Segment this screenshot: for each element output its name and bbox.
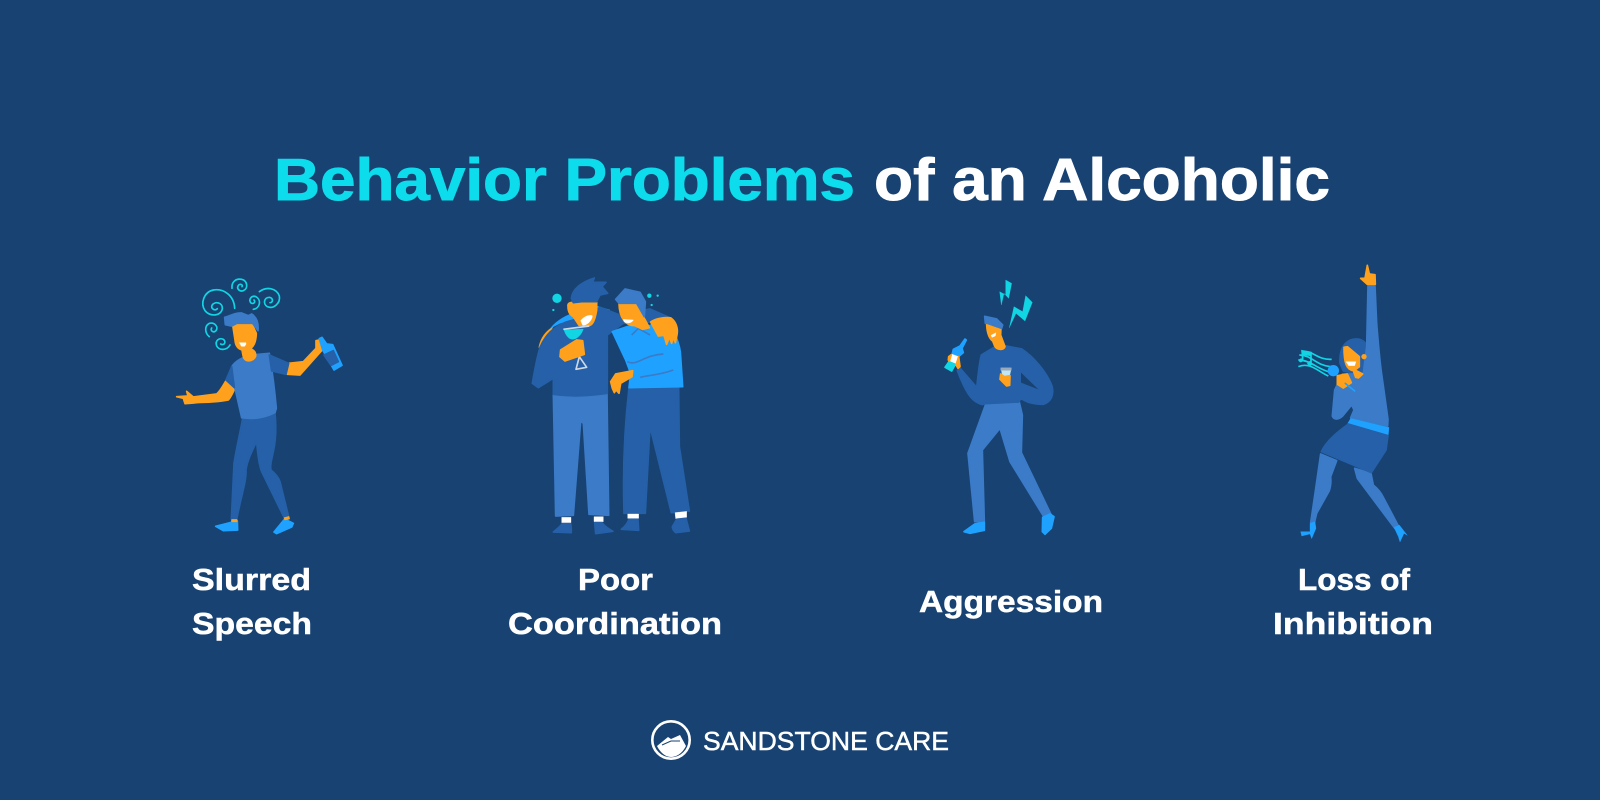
hair — [1340, 339, 1373, 374]
left arm — [177, 381, 235, 404]
label: slurred speech: Slurred — [192, 562, 311, 597]
bottle — [319, 337, 342, 370]
shoes — [216, 519, 293, 534]
icon: dizzy spirals — [203, 279, 279, 349]
head — [233, 323, 256, 361]
icon: mountain badge — [652, 721, 690, 759]
sweater and raised arm — [1332, 286, 1388, 426]
legs — [1311, 454, 1399, 529]
label: loss of inhibition: Inhibition — [1273, 606, 1433, 641]
left man socks and shoes — [562, 517, 603, 523]
right man shirt — [612, 321, 683, 388]
right man hand on stomach — [611, 371, 633, 393]
shirt — [232, 353, 276, 418]
figure: loss of inhibition — [1298, 265, 1407, 542]
head — [987, 323, 1005, 349]
label: loss of inhibition: Loss of — [1298, 562, 1411, 597]
figure: slurred speech — [177, 279, 342, 534]
right man hand on shoulder — [651, 318, 677, 344]
label: slurred speech: Speech — [192, 606, 312, 641]
shoes — [1301, 522, 1407, 542]
icon: bubbles — [552, 293, 659, 311]
label: poor coordination: Poor — [578, 562, 653, 597]
microphone — [1328, 365, 1355, 391]
glass in hand — [1000, 368, 1011, 386]
right man pants — [624, 387, 689, 513]
title: of an Alcoholic — [874, 147, 1330, 213]
title: Behavior Problems — [274, 147, 855, 213]
right man head — [619, 302, 649, 329]
legs — [231, 413, 289, 520]
skirt — [1321, 424, 1388, 473]
icon: lightning bolts — [1000, 280, 1032, 328]
figure: poor coordination — [532, 278, 689, 534]
raised hand — [1361, 265, 1375, 284]
right arm — [287, 339, 327, 375]
logo: sandstone care — [652, 721, 949, 759]
figure: aggression — [945, 280, 1054, 534]
label: aggression: Aggression — [919, 584, 1103, 619]
wordmark: SANDSTONE CARE — [703, 728, 949, 756]
left man sweater and arm around shoulder — [532, 307, 669, 396]
label: poor coordination: Coordination — [508, 606, 722, 641]
label: poor coordination — [508, 562, 722, 641]
cocktail glass — [560, 326, 589, 369]
label: slurred speech — [192, 562, 312, 641]
legs — [968, 402, 1051, 522]
left man pants — [553, 394, 609, 516]
right man socks and shoes — [628, 511, 687, 519]
sweater — [957, 346, 1053, 405]
shoes — [964, 514, 1054, 534]
left man head — [568, 299, 597, 325]
face — [1344, 347, 1363, 378]
beer bottle — [945, 339, 966, 371]
label: loss of inhibition — [1273, 562, 1433, 641]
icon: music notes — [1298, 350, 1332, 376]
back arc — [539, 327, 553, 348]
belt — [1348, 418, 1389, 435]
title — [274, 147, 1330, 213]
